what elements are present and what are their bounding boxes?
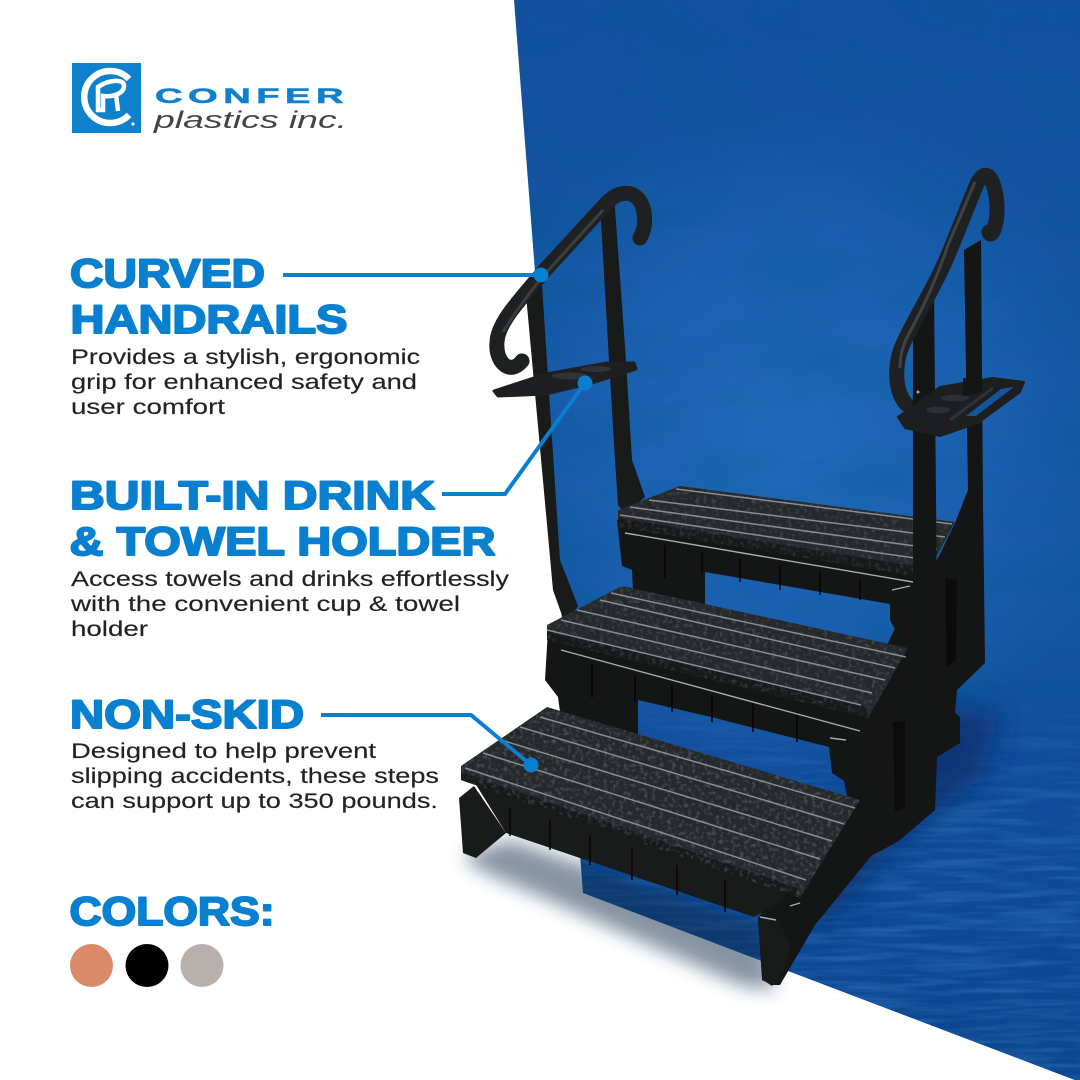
top step tread <box>618 486 955 578</box>
description <box>71 345 420 419</box>
right front post slot detail <box>893 722 905 812</box>
description: Provides a stylish, ergonomic <box>71 345 420 369</box>
logo mark <box>72 63 141 133</box>
left drink and towel tray <box>494 363 636 396</box>
description <box>70 567 509 641</box>
colors section <box>70 890 274 987</box>
floor shadow under steps <box>462 840 775 990</box>
heading: CURVED <box>70 252 265 296</box>
right front post <box>860 290 937 850</box>
right panel slot detail <box>945 578 957 668</box>
heading <box>70 252 348 342</box>
logo: Confer Plastics <box>72 63 349 134</box>
top step leg and riser <box>617 520 925 637</box>
heading: HANDRAILS <box>70 298 348 342</box>
middle step leg and riser <box>545 630 880 790</box>
middle step <box>545 586 908 790</box>
right back post and side panel <box>840 240 985 862</box>
description: slipping accidents, these steps <box>71 764 439 788</box>
heading: BUILT-IN DRINK <box>70 474 435 518</box>
callout: built-in drink and towel holder <box>70 376 592 641</box>
callout: curved handrails <box>70 252 548 419</box>
bottom step right side <box>758 800 880 985</box>
illustration: three-step stair unit with handrails <box>459 175 1024 986</box>
right curved handrail <box>897 175 997 410</box>
heading <box>70 474 496 564</box>
left back post <box>600 195 645 514</box>
colors heading: COLORS: <box>70 890 274 934</box>
left curved handrail <box>497 193 645 367</box>
bottom step riser <box>470 770 795 917</box>
description: Designed to help prevent <box>71 739 376 763</box>
description: with the convenient cup & towel <box>70 592 460 616</box>
logo wordmark CONFER: CONFER <box>155 85 349 108</box>
swatch: black <box>126 944 168 987</box>
right drink and towel tray <box>898 378 1024 436</box>
heading: & TOWEL HOLDER <box>70 520 496 564</box>
callout: non-skid <box>70 693 538 813</box>
logo wordmark plastics inc.: plastics inc. <box>152 107 347 134</box>
description: holder <box>71 617 148 641</box>
left foot of bottom step <box>459 786 506 858</box>
right foot of bottom step <box>758 918 790 986</box>
left front post <box>526 285 578 624</box>
swatch: gray <box>180 944 224 987</box>
pointer line to tread <box>321 715 538 772</box>
description: grip for enhanced safety and <box>71 370 417 394</box>
swatch: terracotta <box>70 944 113 987</box>
middle step tread <box>547 586 908 718</box>
pointer line to handrail <box>283 268 548 282</box>
pointer line to tray <box>442 376 592 494</box>
bottom step <box>459 707 880 986</box>
description <box>71 739 439 813</box>
description: user comfort <box>71 395 225 419</box>
top step <box>617 486 955 637</box>
description: Access towels and drinks effortlessly <box>71 567 509 591</box>
bottom step tread <box>461 707 860 898</box>
description: can support up to 350 pounds. <box>71 789 438 813</box>
heading: NON-SKID <box>70 693 304 737</box>
panel: blue textured backdrop <box>500 0 1080 1080</box>
